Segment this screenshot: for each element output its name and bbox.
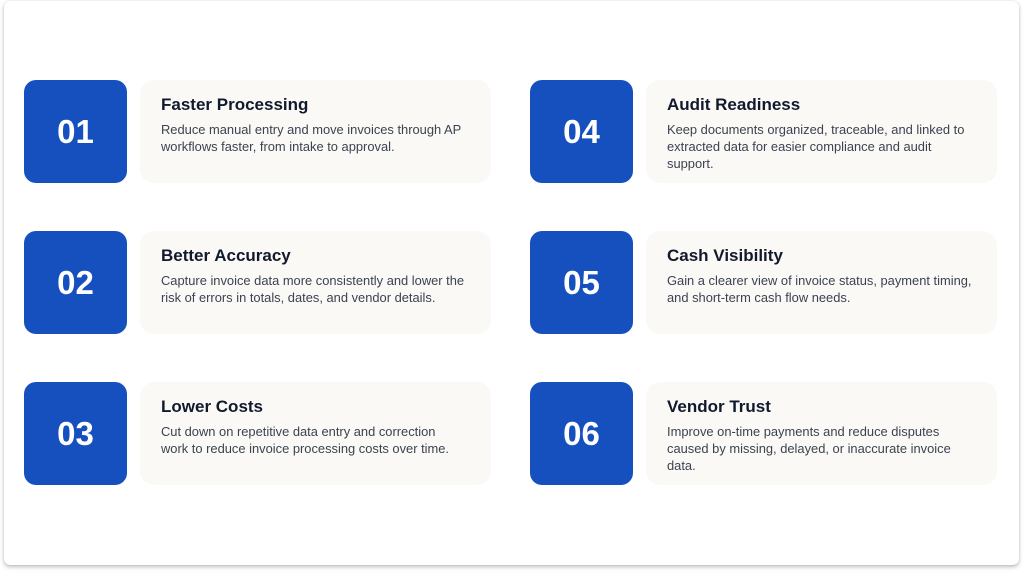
- number badge 05: 05: [563, 264, 600, 300]
- item 03: [24, 382, 491, 485]
- card: Lower Costs: [140, 382, 491, 485]
- number badge 02: 02: [57, 264, 94, 300]
- card: Cash Visibility: Cash Visibility: [667, 246, 783, 265]
- card: Faster Processing: Reduce manual entry and move invoices through AP: [161, 122, 461, 137]
- card: Better Accuracy: [140, 231, 491, 334]
- number badge 06: [530, 382, 633, 485]
- card: Cash Visibility: and short-term cash flow needs.: [667, 290, 850, 305]
- item 02: [24, 231, 491, 334]
- item 04: [530, 80, 997, 183]
- item 06: [530, 382, 997, 485]
- number badge 04: 04: [563, 112, 600, 150]
- card: Better Accuracy: risk of errors in totals, dates, and vendor details.: [161, 290, 435, 305]
- number badge 04: [530, 80, 633, 183]
- number badge 02: [24, 231, 127, 334]
- card: Cash Visibility: Gain a clearer view of invoice status, payment timing,: [667, 273, 972, 288]
- card: Better Accuracy: Better Accuracy: [161, 246, 291, 265]
- number badge 06: 06: [563, 414, 600, 452]
- card: Vendor Trust: Improve on-time payments and reduce disputes: [667, 424, 939, 439]
- card: Lower Costs: Lower Costs: [161, 397, 263, 416]
- number badge 03: 03: [57, 414, 94, 452]
- card: Audit Readiness: support.: [667, 156, 714, 171]
- card: Lower Costs: work to reduce invoice processing costs over time.: [161, 441, 449, 456]
- item 05: [530, 231, 997, 334]
- item 01: [24, 80, 491, 183]
- card: Vendor Trust: data.: [667, 458, 696, 473]
- card: Vendor Trust: [646, 382, 997, 485]
- number badge 05: [530, 231, 633, 334]
- card: Audit Readiness: Audit Readiness: [667, 95, 800, 114]
- number badge 03: [24, 382, 127, 485]
- card: Audit Readiness: Keep documents organized, traceable, and linked to: [667, 122, 964, 137]
- card: Faster Processing: workflows faster, from intake to approval.: [161, 139, 395, 154]
- number badge 01: [24, 80, 127, 183]
- card: Vendor Trust: caused by missing, delayed, or inaccurate invoice: [667, 441, 951, 456]
- number badge 01: 01: [57, 112, 94, 150]
- card: Audit Readiness: extracted data for easier compliance and audit: [667, 139, 931, 154]
- card: Better Accuracy: Capture invoice data more consistently and lower the: [161, 273, 464, 288]
- card: Faster Processing: Faster Processing: [161, 95, 308, 114]
- card: Audit Readiness: [646, 80, 997, 183]
- card: Vendor Trust: Vendor Trust: [667, 397, 771, 416]
- card: Lower Costs: Cut down on repetitive data entry and correction: [161, 424, 435, 439]
- card: Cash Visibility: [646, 231, 997, 334]
- card: Faster Processing: [140, 80, 491, 183]
